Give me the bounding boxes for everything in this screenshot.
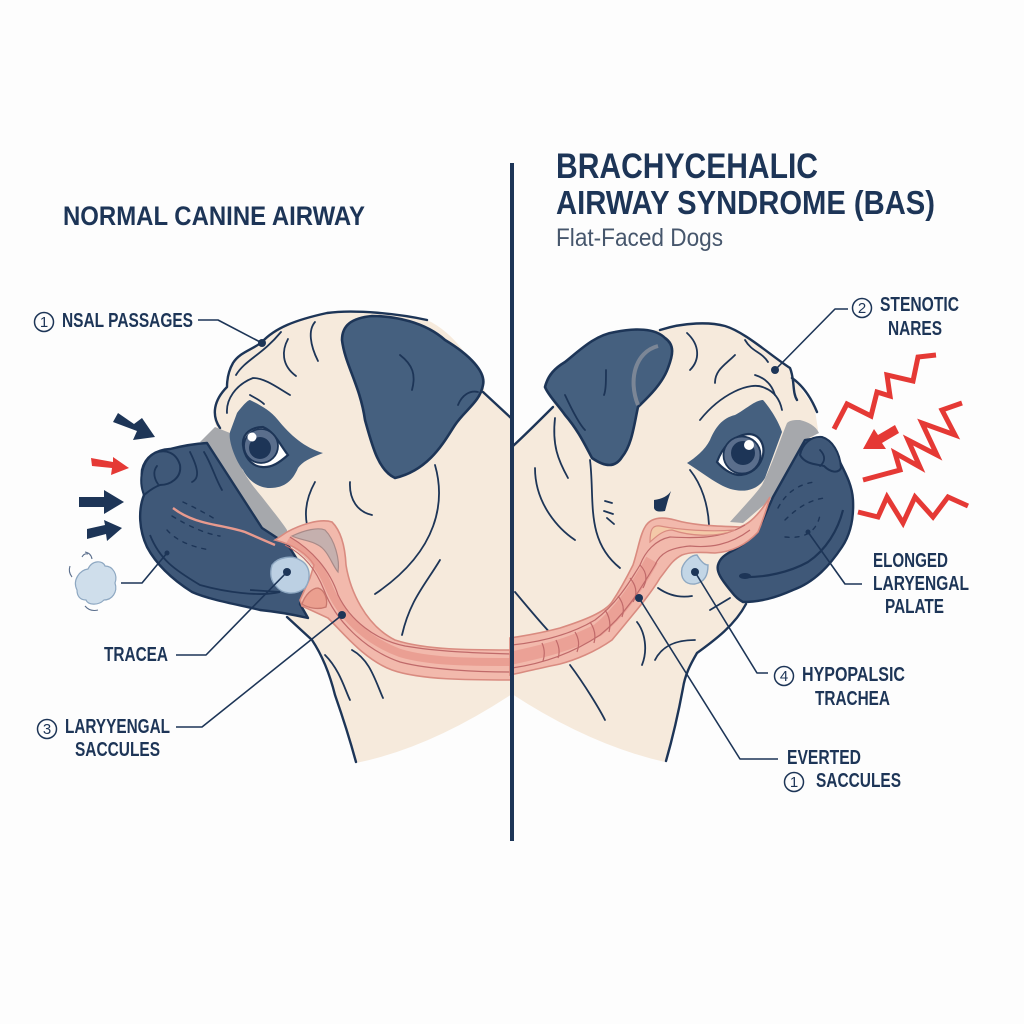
right zigzag distress marks — [834, 355, 968, 523]
label: laryngeal saccules: SACCULES — [75, 739, 160, 761]
label: stenotic nares — [771, 294, 959, 374]
right muzzle whisker dots — [778, 482, 825, 537]
label: hypopalsic trachea: TRACHEA — [815, 688, 890, 710]
label: stenotic nares: NARES — [888, 318, 942, 340]
right eye patch — [687, 400, 782, 491]
left panel title: NORMAL CANINE AIRWAY — [63, 201, 365, 231]
label: puff leader — [121, 550, 170, 583]
right muzzle — [718, 439, 853, 602]
label: hypopalsic trachea: 4 — [780, 668, 788, 685]
label: everted saccules: EVERTED — [787, 747, 861, 769]
left dog head and neck silhouette — [214, 312, 512, 763]
right forehead wrinkles — [515, 333, 782, 720]
right trachea — [510, 497, 770, 675]
left trachea — [275, 521, 512, 680]
right palate flap — [650, 526, 735, 542]
left nose — [141, 451, 180, 495]
right mouth line — [741, 510, 843, 577]
left dog: normal canine airway — [140, 312, 512, 763]
label: everted saccules: SACCULES — [816, 770, 901, 792]
forehead wrinkles — [227, 322, 440, 700]
left muzzle whisker dots — [150, 502, 280, 594]
left soft palate — [292, 529, 338, 572]
navy arrow middle — [79, 490, 124, 514]
trachea rings — [542, 565, 646, 661]
left lip line (pink) — [173, 508, 275, 545]
right eye — [717, 434, 763, 475]
left incoming airflow arrows — [79, 413, 155, 541]
label: laryngeal saccules: 3 — [43, 721, 51, 738]
label: tracea — [104, 568, 291, 666]
right dog head and neck silhouette — [512, 322, 818, 762]
right cheek mark — [654, 491, 671, 512]
left blue node (airway opening) — [271, 557, 309, 593]
label: stenotic nares: 2 — [858, 300, 866, 317]
label: nasal passages — [34, 310, 266, 347]
left muzzle — [140, 443, 310, 618]
label: laryngeal saccules: LARYYENGAL — [65, 716, 170, 738]
right dog: brachycephalic airway — [510, 322, 853, 762]
right nose — [800, 437, 841, 472]
red zigzag top — [834, 355, 936, 429]
label: elonged laryngeal palate: PALATE — [885, 596, 944, 618]
right panel title: Flat-Faced Dogs — [556, 224, 723, 252]
red arrow — [91, 457, 129, 475]
right panel title — [556, 147, 935, 252]
right blue lobule (hypoplastic trachea) — [682, 555, 708, 584]
right muzzle grey band — [730, 420, 819, 523]
label: hypopalsic trachea — [691, 568, 905, 710]
label: everted saccules: 1 — [790, 774, 798, 791]
label: everted saccules — [635, 594, 901, 792]
label: elonged laryngeal palate — [806, 530, 969, 618]
left muzzle grey band — [200, 427, 287, 545]
label: nasal passages: 1 — [40, 314, 48, 331]
label: laryngeal saccules — [38, 611, 346, 761]
label: nasal passages: NSAL PASSAGES — [62, 310, 193, 332]
label: elonged laryngeal palate: LARYENGAL — [873, 573, 969, 595]
red arrow right — [863, 425, 899, 449]
right ear — [545, 330, 672, 465]
left ear — [342, 316, 483, 478]
label: stenotic nares: STENOTIC — [880, 294, 959, 316]
central divider — [510, 163, 514, 841]
left eye — [243, 427, 288, 467]
navy arrow lower — [87, 520, 122, 541]
navy arrow top — [113, 413, 155, 440]
left exhaled puff cloud — [69, 552, 116, 610]
label: hypopalsic trachea: HYPOPALSIC — [802, 664, 905, 686]
left laryngeal saccule — [302, 588, 327, 608]
red zigzag middle — [863, 403, 962, 480]
left eye patch — [230, 400, 323, 488]
right panel title: AIRWAY SYNDROME (BAS) — [556, 184, 935, 221]
label: elonged laryngeal palate: ELONGED — [873, 550, 948, 572]
red zigzag lower — [858, 497, 968, 523]
right panel title: BRACHYCEHALIC — [556, 147, 818, 186]
label: tracea: TRACEA — [104, 644, 168, 666]
